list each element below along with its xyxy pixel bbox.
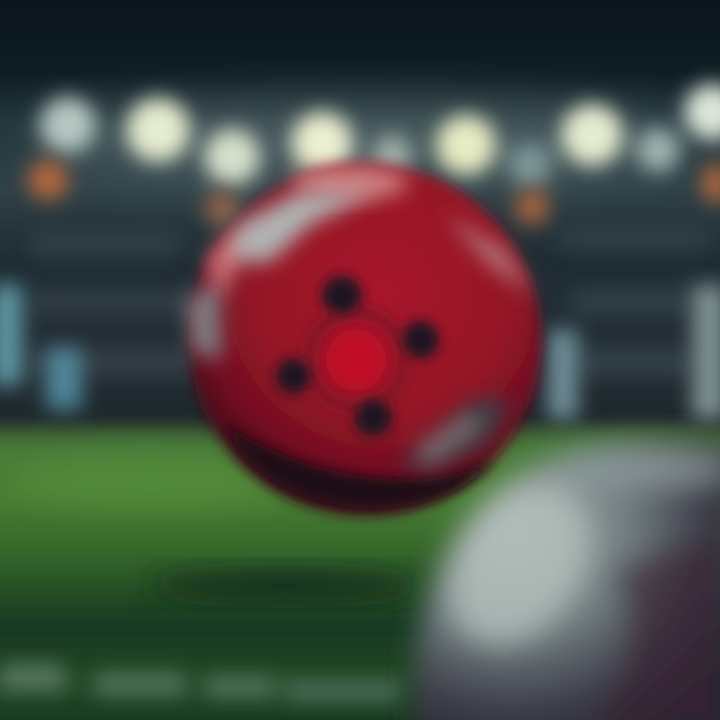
ball white panels — [186, 192, 532, 472]
distant figures — [0, 285, 720, 420]
ball shadow on pitch — [150, 571, 420, 599]
pitch bottom line — [0, 664, 400, 702]
stadium floodlights — [30, 84, 720, 187]
ball lower shadow — [225, 425, 495, 508]
white foreground ball — [414, 438, 720, 720]
ball top pink panel — [292, 166, 408, 200]
orange glows — [28, 160, 720, 226]
red ball — [186, 164, 541, 516]
grass pitch — [0, 432, 720, 720]
ball body — [189, 164, 541, 516]
ball centre emblem — [276, 276, 439, 436]
pitch highlight — [10, 452, 290, 508]
